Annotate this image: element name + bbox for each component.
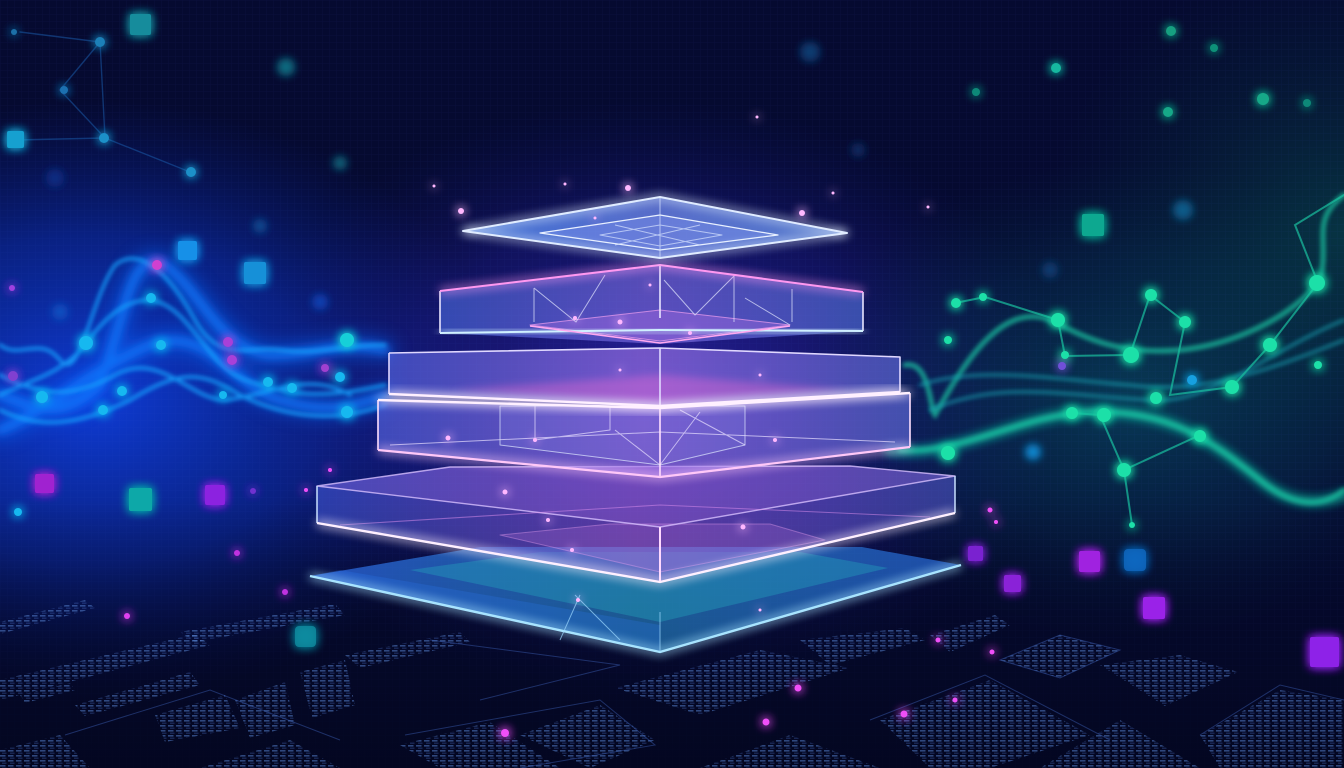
left blue data waves — [0, 32, 385, 430]
layer 1: top plate — [463, 197, 847, 258]
background: circuit board floor — [0, 600, 1344, 768]
sparkles — [432, 116, 930, 612]
right teal data waves — [890, 195, 1344, 525]
layer stack — [310, 116, 961, 652]
layer 6: base plate — [310, 547, 961, 652]
layer 4: glass box with inner frame — [378, 393, 910, 477]
layer 3: glass box — [378, 348, 910, 408]
layer 5: wide glass slab — [317, 466, 955, 582]
layer 2: glass box — [440, 265, 863, 344]
